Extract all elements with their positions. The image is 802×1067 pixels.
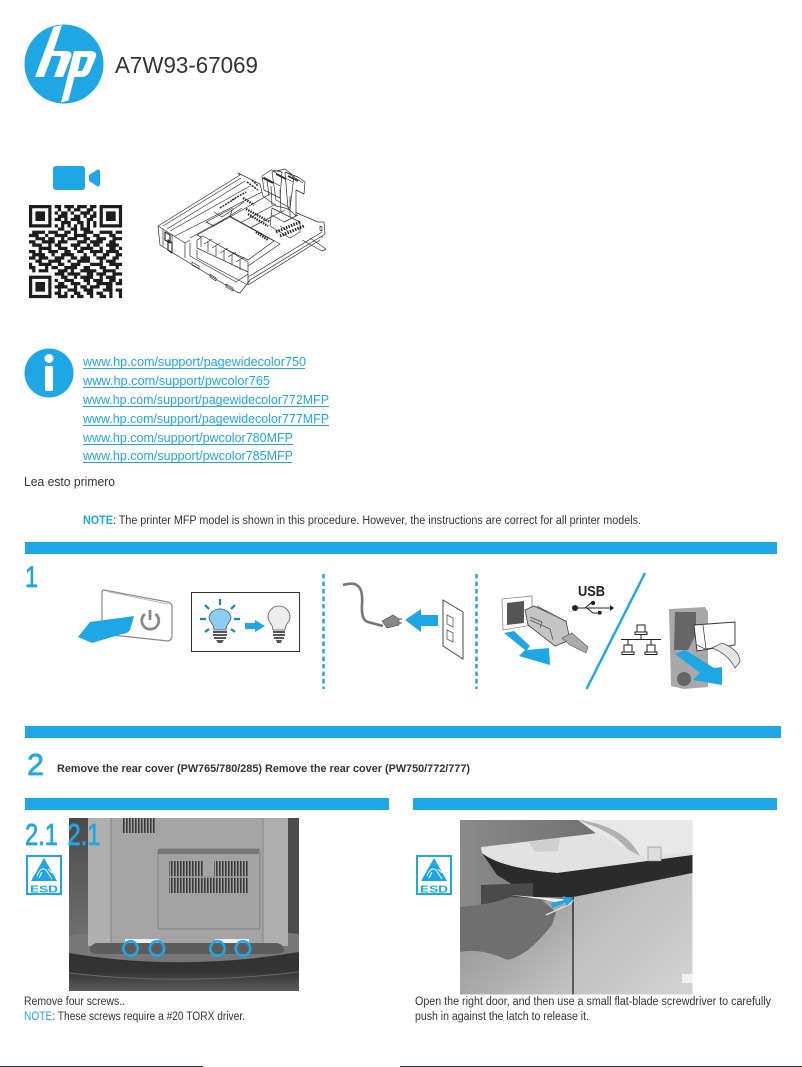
page bottom edge	[0, 1066, 802, 1067]
support links: www.hp.com/support/pagewidecolor750	[82, 354, 306, 369]
printer formatter assembly line drawing	[158, 169, 326, 293]
USB label and symbol: USB	[578, 584, 605, 600]
icon: unplug power cord from wall outlet	[343, 584, 463, 659]
support links	[82, 354, 329, 463]
diagonal separator	[586, 573, 645, 689]
left step caption: Remove four screws..	[24, 996, 125, 1008]
icon: video camera	[53, 166, 100, 190]
icon: light bulbs in box	[192, 592, 300, 652]
step number 2.1: 2.1	[25, 817, 58, 852]
right step caption: push in against the latch to release it.	[415, 1011, 589, 1023]
USB label and symbol	[572, 584, 614, 614]
step 2.1 left header bar	[25, 798, 389, 810]
support links: www.hp.com/support/pagewidecolor777MFP	[82, 411, 329, 426]
step number 2.1 repeat: 2.1	[68, 817, 100, 852]
icon: information	[24, 348, 74, 398]
QR code	[29, 205, 122, 298]
icon: ESD warning left: ESD	[30, 884, 58, 896]
icon: press power button	[78, 590, 172, 643]
support links: www.hp.com/support/pwcolor780MFP	[82, 430, 293, 445]
printer model note: NOTE: The printer MFP model is shown in this procedure. However, the instructions are correct for all printer models.	[83, 515, 641, 527]
dashed divider	[475, 574, 478, 689]
read first text: Lea esto primero	[24, 475, 115, 489]
icon: ESD warning right	[417, 856, 451, 896]
icon: network symbol	[621, 625, 661, 654]
icon: network cable unplug	[669, 607, 740, 689]
icon: ESD warning left	[27, 856, 61, 896]
step 2 description: Remove the rear cover (PW765/780/285) Remove the rear cover (PW750/772/777)	[57, 763, 470, 775]
part number title: A7W93-67069	[115, 52, 258, 78]
left step note: NOTE: These screws require a #20 TORX driver.	[24, 1011, 245, 1023]
photo: right door with screwdriver and hand	[460, 820, 692, 994]
step 2 number: 2	[27, 747, 44, 782]
support links: www.hp.com/support/pwcolor785MFP	[82, 448, 293, 463]
icon: ESD warning right: ESD	[420, 884, 448, 896]
HP logo	[24, 24, 104, 104]
right step caption: Open the right door, and then use a small flat-blade screwdriver to carefully	[415, 996, 771, 1008]
dashed divider	[322, 574, 325, 689]
step 2 header bar	[25, 726, 781, 738]
support links: www.hp.com/support/pwcolor765	[82, 373, 270, 388]
icon: USB cable unplug	[502, 596, 588, 665]
step 1 header bar	[25, 542, 777, 554]
photo: printer rear with four screws circled	[69, 818, 299, 991]
support links: www.hp.com/support/pagewidecolor772MFP	[82, 392, 329, 407]
right step caption	[415, 996, 771, 1023]
step 2.1 right header bar	[413, 798, 777, 810]
step 1 number: 1	[25, 561, 38, 594]
